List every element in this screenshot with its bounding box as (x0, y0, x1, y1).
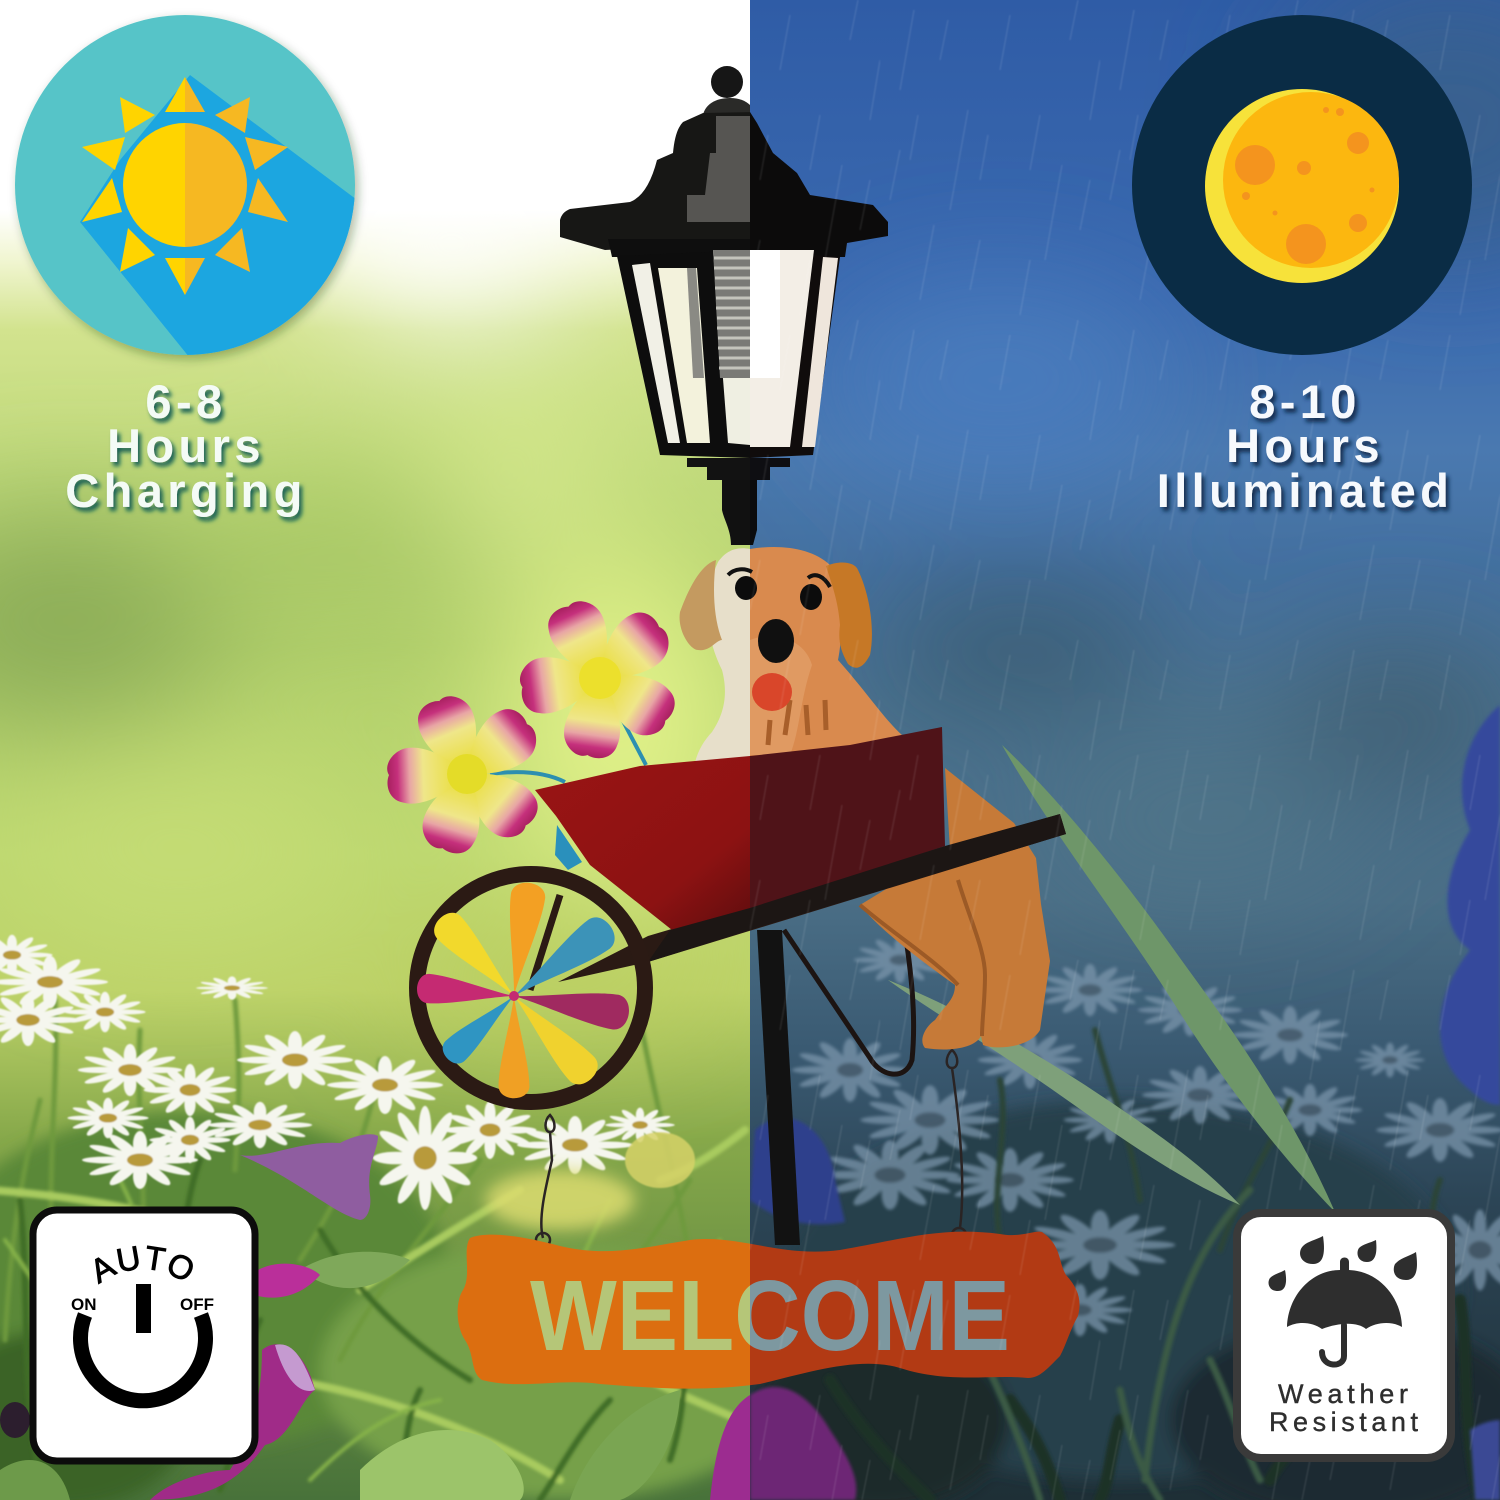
text: illuminated hours: 8-10 (1249, 375, 1361, 428)
text: illuminated hours: Illuminated (1157, 464, 1453, 517)
icon: umbrella (1269, 1236, 1417, 1365)
wire brace (784, 930, 914, 1074)
label: resistant: Resistant (1269, 1407, 1418, 1437)
icon: sun badge (15, 15, 400, 420)
purple petunias (0, 1134, 750, 1500)
teal bracket (555, 825, 582, 870)
sun rays left (82, 77, 185, 295)
solar lantern left half (560, 66, 800, 545)
text: illuminated hours (1157, 375, 1453, 517)
label: auto: AUTO (94, 1245, 193, 1285)
sun disc (123, 123, 247, 247)
wheel (417, 874, 645, 1102)
muzzle and chest shading (750, 636, 812, 755)
rain overlay (750, 0, 1500, 1500)
text: charging hours: Charging (65, 464, 307, 517)
long shadow (80, 75, 400, 420)
flower stems (490, 700, 646, 782)
wheelbarrow tray (535, 727, 945, 930)
text: illuminated hours: Hours (1226, 419, 1384, 472)
dog eyes and brows (728, 569, 830, 610)
blue flowers (750, 705, 1500, 1500)
left ear (680, 560, 722, 650)
rear flower (517, 594, 682, 761)
text: charging hours: Hours (107, 419, 265, 472)
panel: weather resistant badge (1237, 1213, 1451, 1458)
label: weather: Weather (1278, 1379, 1408, 1409)
mouth (752, 673, 792, 711)
panel: auto switch badge (30, 1206, 258, 1464)
sun rays right (185, 77, 288, 295)
moon craters (1235, 107, 1374, 264)
icon: power symbol (81, 1284, 206, 1401)
pinwheel (416, 881, 631, 1098)
dog rear leg folds (860, 880, 985, 1036)
white daisies (0, 935, 695, 1230)
wildflower stems and leaves (0, 1000, 745, 1500)
large foreground leaves (0, 1252, 680, 1500)
nose (758, 619, 794, 663)
dog rear body (860, 768, 1050, 1050)
text: charging hours (65, 375, 307, 517)
label: on: ON (71, 1295, 96, 1314)
welcome sign (458, 1232, 1079, 1389)
solar lantern right half (750, 112, 888, 545)
front flower (386, 689, 546, 858)
rain drops (1300, 1236, 1324, 1264)
support pole (757, 930, 800, 1245)
text: charging hours: 6-8 (145, 375, 227, 428)
grass blades (888, 745, 1335, 1212)
dark foliage and stems (830, 1030, 1480, 1500)
wheelbarrow handle (558, 814, 1066, 982)
sign hanger chains (536, 1050, 966, 1247)
icon: moon badge (1132, 15, 1472, 355)
panel: daytime background (0, 219, 750, 1500)
dog left half (680, 548, 750, 761)
right ear (826, 563, 872, 668)
sign lettering: WELCOME (530, 1260, 1010, 1372)
panel: rainy night background (750, 0, 1500, 1500)
label: off: OFF (180, 1295, 214, 1314)
handle over tray (648, 814, 1066, 962)
rainy daisies (792, 937, 1500, 1336)
dog right half (750, 547, 902, 756)
